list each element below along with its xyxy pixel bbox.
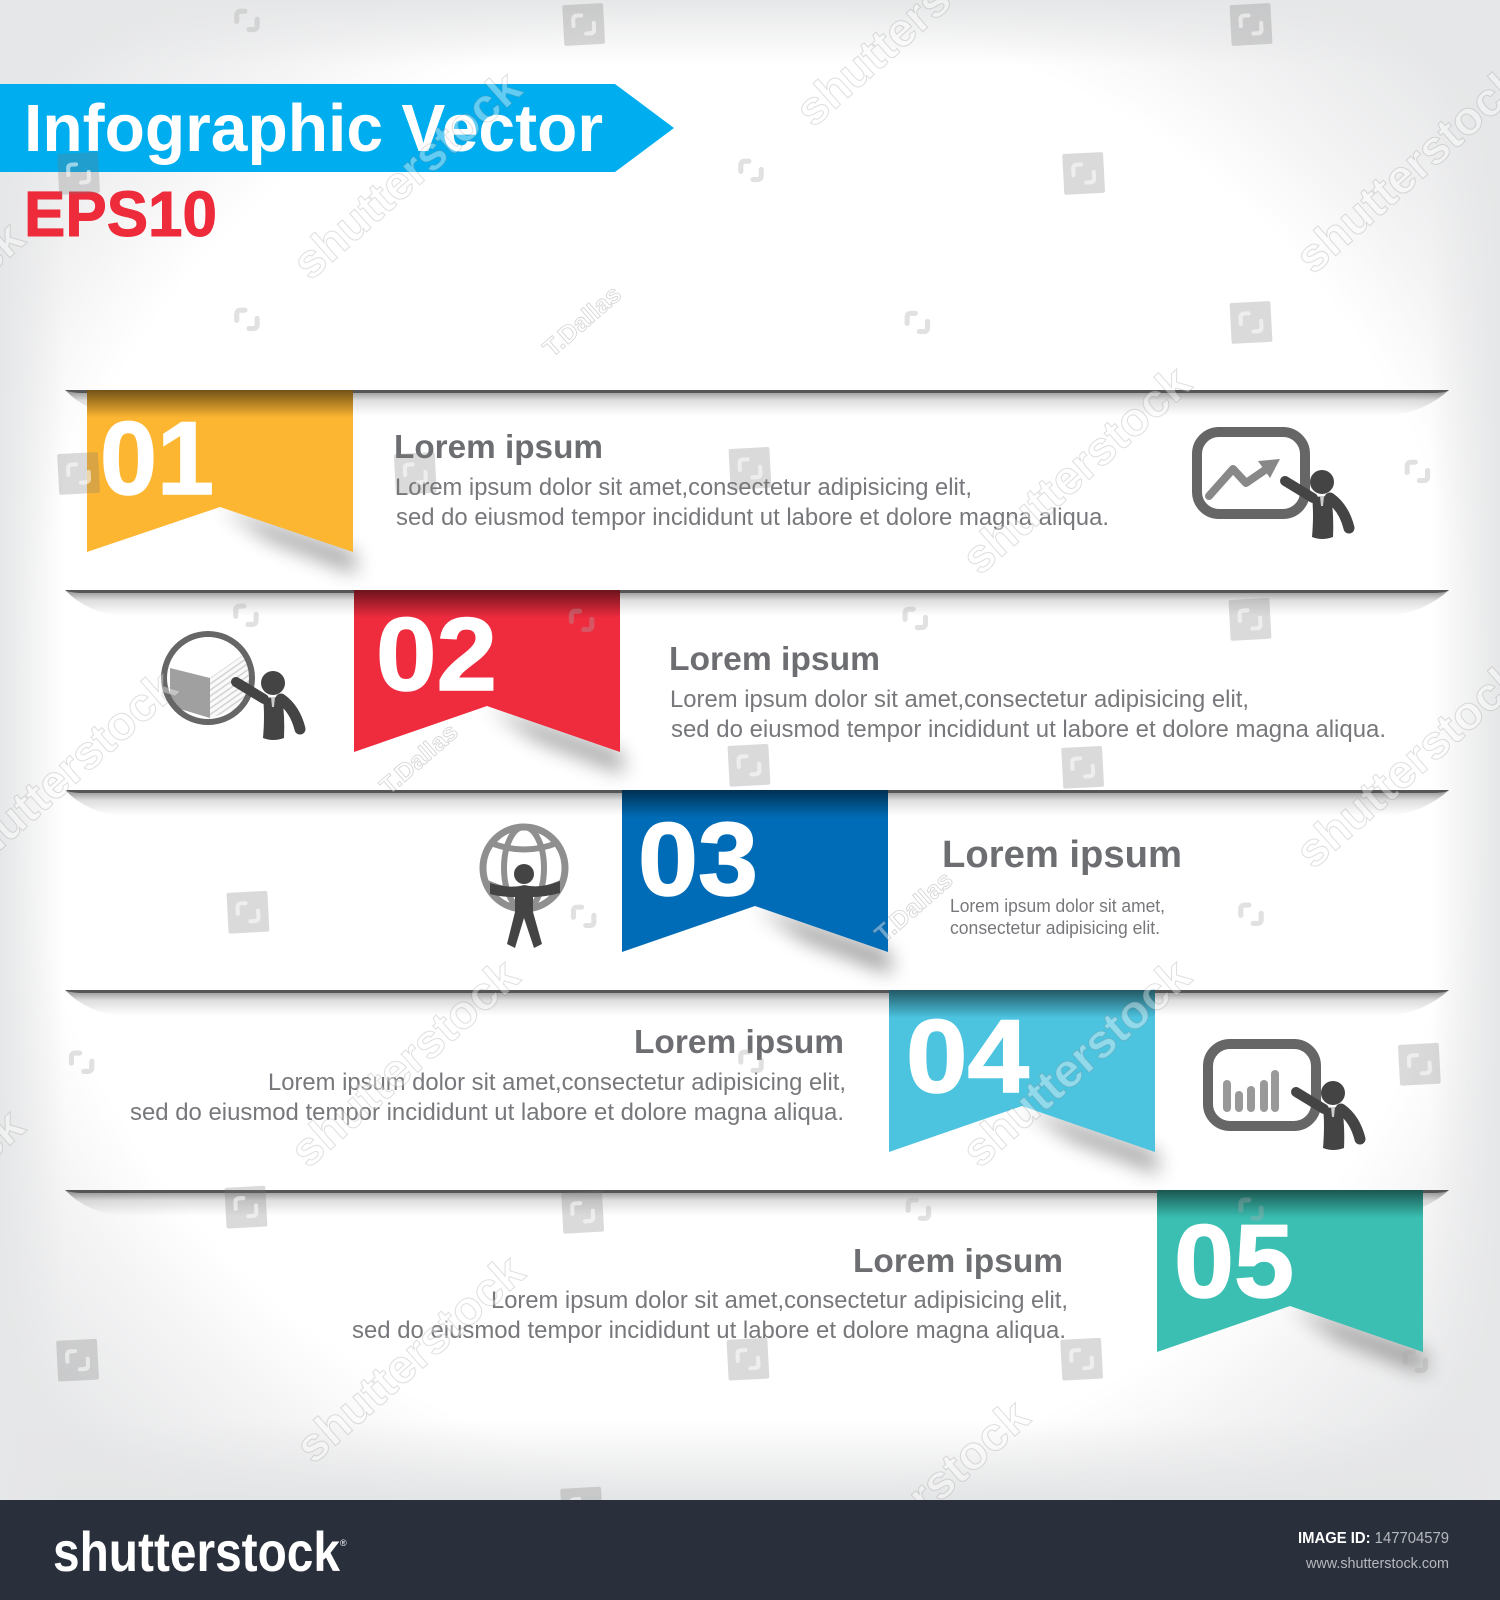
text block 1: Lorem ipsum	[394, 428, 603, 465]
text block 3: Lorem ipsum dolor sit amet,	[950, 896, 1165, 916]
text block 3: Lorem ipsum	[942, 834, 1182, 876]
watermark overlay: shutterstock	[285, 1244, 535, 1473]
text block 1	[394, 428, 1109, 531]
icon: presenter with rising chart	[1197, 432, 1349, 539]
watermark overlay: T.Dallas	[375, 718, 464, 800]
ribbon 02: 02	[376, 597, 497, 713]
footer registered mark: ®	[340, 1538, 347, 1548]
text block 5: sed do eiusmod tempor incididunt ut labore et dolore magna aliqua.	[352, 1317, 1066, 1344]
icon: person holding globe	[483, 827, 565, 948]
row 3	[65, 790, 1449, 974]
footer logo: shutterstock	[53, 1520, 341, 1583]
ribbon 01: 01	[100, 401, 214, 517]
text block 2: Lorem ipsum dolor sit amet,consectetur adipisicing elit,	[670, 686, 1249, 713]
watermark overlay: shutterstock	[282, 60, 531, 289]
text block 4: Lorem ipsum	[634, 1023, 844, 1060]
ribbon 02	[354, 590, 620, 752]
ribbon 03: 03	[638, 802, 758, 918]
watermark overlay: shutterstock	[952, 948, 1201, 1177]
watermark overlay: shutterstock	[280, 948, 529, 1177]
text block 1: sed do eiusmod tempor incididunt ut labore et dolore magna aliqua.	[396, 504, 1109, 531]
text block 3	[942, 834, 1182, 938]
row 1	[65, 390, 1449, 574]
row 5	[65, 1190, 1449, 1374]
watermark overlay: T.Dallas	[870, 866, 958, 948]
ribbon 03	[622, 790, 888, 952]
text block 4: Lorem ipsum dolor sit amet,consectetur adipisicing elit,	[268, 1069, 846, 1096]
text block 1: Lorem ipsum dolor sit amet,consectetur adipisicing elit,	[395, 474, 972, 501]
footer bar	[0, 1500, 1500, 1600]
footer url: www.shutterstock.com	[1305, 1555, 1449, 1572]
text block 2: sed do eiusmod tempor incididunt ut labore et dolore magna aliqua.	[671, 716, 1386, 743]
row 4	[65, 990, 1449, 1174]
title banner: Infographic Vector	[24, 91, 603, 166]
text block 3: consectetur adipisicing elit.	[950, 918, 1160, 938]
watermark overlay: shutterstock	[952, 355, 1201, 584]
text block 4: sed do eiusmod tempor incididunt ut labore et dolore magna aliqua.	[130, 1099, 844, 1126]
ribbon 05	[1157, 1190, 1423, 1352]
ribbon 04: 04	[906, 999, 1029, 1115]
text block 2: Lorem ipsum	[669, 640, 880, 677]
text block 5	[352, 1242, 1068, 1344]
text block 2	[669, 640, 1386, 743]
ribbon 01	[87, 390, 353, 552]
icon: presenter with magnifier circle	[164, 634, 300, 740]
subtitle EPS10: EPS10	[24, 178, 217, 250]
row 2	[65, 590, 1449, 774]
watermark overlay: T.Dallas	[538, 281, 627, 363]
icon: presenter with bar chart	[1208, 1044, 1360, 1150]
text block 5: Lorem ipsum	[853, 1242, 1063, 1279]
text block 5: Lorem ipsum dolor sit amet,consectetur adipisicing elit,	[491, 1287, 1068, 1314]
footer image id: IMAGE ID: 147704579	[1298, 1530, 1449, 1547]
ribbon 05: 05	[1174, 1204, 1294, 1320]
text block 4	[130, 1023, 846, 1126]
ribbon 04	[889, 990, 1155, 1152]
